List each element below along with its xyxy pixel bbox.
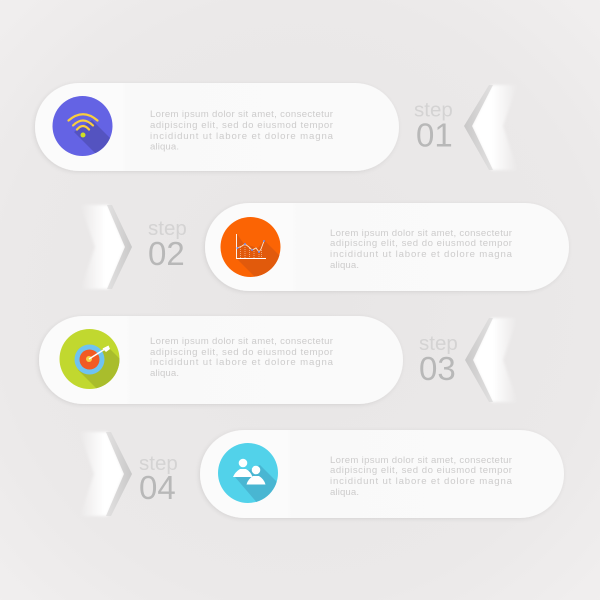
text block 4: Lorem ipsum dolor sit amet, consectetur (330, 455, 513, 466)
text block 3: aliqua. (150, 368, 179, 379)
text block 1: adipiscing elit, sed do eiusmod tempor (150, 120, 334, 131)
text block 3: incididunt ut labore et dolore magna (150, 357, 334, 368)
text block 4: aliqua. (330, 487, 359, 498)
text block 2: incididunt ut labore et dolore magna (330, 249, 513, 260)
text block 1: incididunt ut labore et dolore magna (150, 131, 334, 142)
icon: people (218, 443, 278, 503)
step label 02: step (148, 217, 187, 240)
step label 01: 01 (416, 116, 453, 154)
icon: wifi (52, 96, 112, 156)
chevron arrow 1 (464, 85, 517, 170)
text block 4: incididunt ut labore et dolore magna (330, 476, 513, 487)
panel: step 4 (200, 430, 564, 518)
text block 4 (330, 455, 513, 498)
pill card 3 (39, 316, 403, 404)
text block 2: adipiscing elit, sed do eiusmod tempor (330, 238, 513, 249)
chevron arrow 3 (465, 318, 517, 402)
text block 3: Lorem ipsum dolor sit amet, consectetur (150, 336, 334, 347)
step label 01 (414, 98, 453, 154)
text block 1 (150, 109, 334, 152)
text block 1: aliqua. (150, 142, 179, 152)
text block 2: Lorem ipsum dolor sit amet, consectetur (330, 228, 513, 239)
panel: step 3 (39, 316, 403, 404)
text block 3 (150, 336, 334, 379)
pill card 1 (35, 83, 399, 171)
chevron arrow 4 (80, 432, 132, 516)
icon: target (60, 329, 120, 389)
chevron arrow 2 (81, 205, 132, 289)
step label 03 (419, 332, 458, 387)
text block 3: adipiscing elit, sed do eiusmod tempor (150, 347, 334, 358)
text block 4: adipiscing elit, sed do eiusmod tempor (330, 465, 513, 476)
pill card 2 (205, 203, 569, 291)
panel: step 1 (35, 83, 399, 171)
step label 03: 03 (419, 350, 456, 387)
step label 02: 02 (148, 235, 185, 272)
step label 04: step (139, 452, 178, 475)
icon: line chart (220, 217, 280, 277)
pill card 4 (200, 430, 564, 518)
step label 03: step (419, 332, 458, 355)
step label 02 (148, 217, 187, 272)
panel: step 2 (205, 203, 569, 292)
step label 04 (139, 452, 178, 506)
text block 2 (330, 228, 513, 271)
text block 2: aliqua. (330, 260, 359, 271)
text block 1: Lorem ipsum dolor sit amet, consectetur (150, 109, 334, 120)
step label 01: step (414, 98, 453, 122)
step label 04: 04 (139, 469, 176, 506)
